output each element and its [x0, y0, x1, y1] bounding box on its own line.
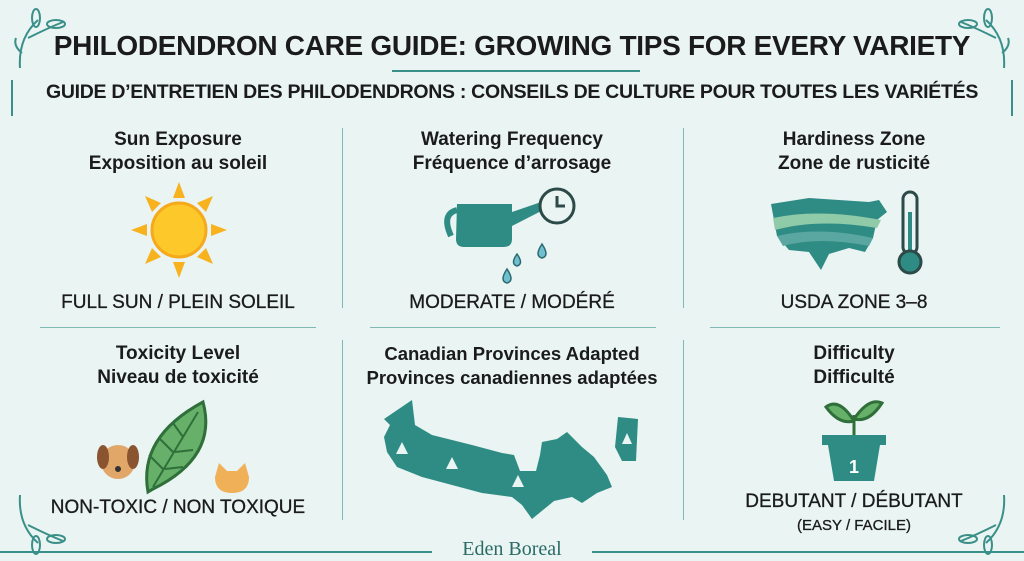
- panel: sun: [61, 129, 295, 313]
- value: difficulty: [745, 490, 963, 534]
- value: hardiness: USDA ZONE 3–8: [781, 292, 927, 313]
- panel: watering: [409, 129, 615, 313]
- icon: potted plant: 1: [849, 457, 859, 477]
- panel: difficulty: [745, 343, 963, 534]
- subtitle: GUIDE D’ENTRETIEN DES PHILODENDRONS : CONSEILS DE CULTURE POUR TOUTES LES VARIÉTÉS: [46, 81, 978, 103]
- icon: sun: [131, 182, 227, 278]
- value: sun: FULL SUN / PLEIN SOLEIL: [61, 292, 295, 313]
- heading: sun: Sun Exposure: [114, 129, 242, 150]
- value: watering: MODERATE / MODÉRÉ: [409, 292, 615, 313]
- heading: toxicity: Niveau de toxicité: [97, 367, 259, 388]
- panel: toxicity: [51, 343, 305, 518]
- heading: hardiness: Hardiness Zone: [783, 129, 925, 150]
- heading: watering: Watering Frequency: [421, 129, 603, 150]
- heading: difficulty: Difficulty: [813, 343, 895, 364]
- icon: potted plant: [822, 400, 886, 481]
- heading: provinces: [366, 343, 658, 388]
- heading: provinces: Canadian Provinces Adapted: [384, 343, 640, 364]
- title: PHILODENDRON CARE GUIDE: GROWING TIPS FOR EVERY VARIETY: [54, 30, 970, 61]
- heading: hardiness: Zone de rusticité: [778, 153, 930, 174]
- heading: watering: [413, 129, 611, 174]
- panel: canadian provinces: [366, 343, 658, 519]
- icon: dog leaf cat: [97, 400, 249, 494]
- footer brand: Eden Boreal: [462, 538, 562, 560]
- heading: difficulty: [813, 343, 895, 388]
- heading: watering: Fréquence d’arrosage: [413, 153, 611, 174]
- value: toxicity: NON-TOXIC / NON TOXIQUE: [51, 497, 305, 518]
- heading: sun: [89, 129, 267, 174]
- icon: canada map: [384, 400, 638, 519]
- heading: toxicity: [97, 343, 259, 388]
- icon: usa map and thermometer: [771, 190, 922, 274]
- heading: difficulty: Difficulté: [813, 367, 895, 388]
- value: difficulty: (EASY / FACILE): [797, 517, 911, 534]
- heading: provinces: Provinces canadiennes adaptées: [366, 367, 658, 388]
- heading: sun: Exposition au soleil: [89, 153, 267, 174]
- icon: watering can and clock: [444, 188, 576, 284]
- heading: hardiness: [778, 129, 930, 174]
- value: difficulty: DEBUTANT / DÉBUTANT: [745, 491, 963, 512]
- panel: hardiness: [771, 129, 930, 313]
- heading: toxicity: Toxicity Level: [116, 343, 240, 364]
- icon: corner vines: [14, 8, 66, 68]
